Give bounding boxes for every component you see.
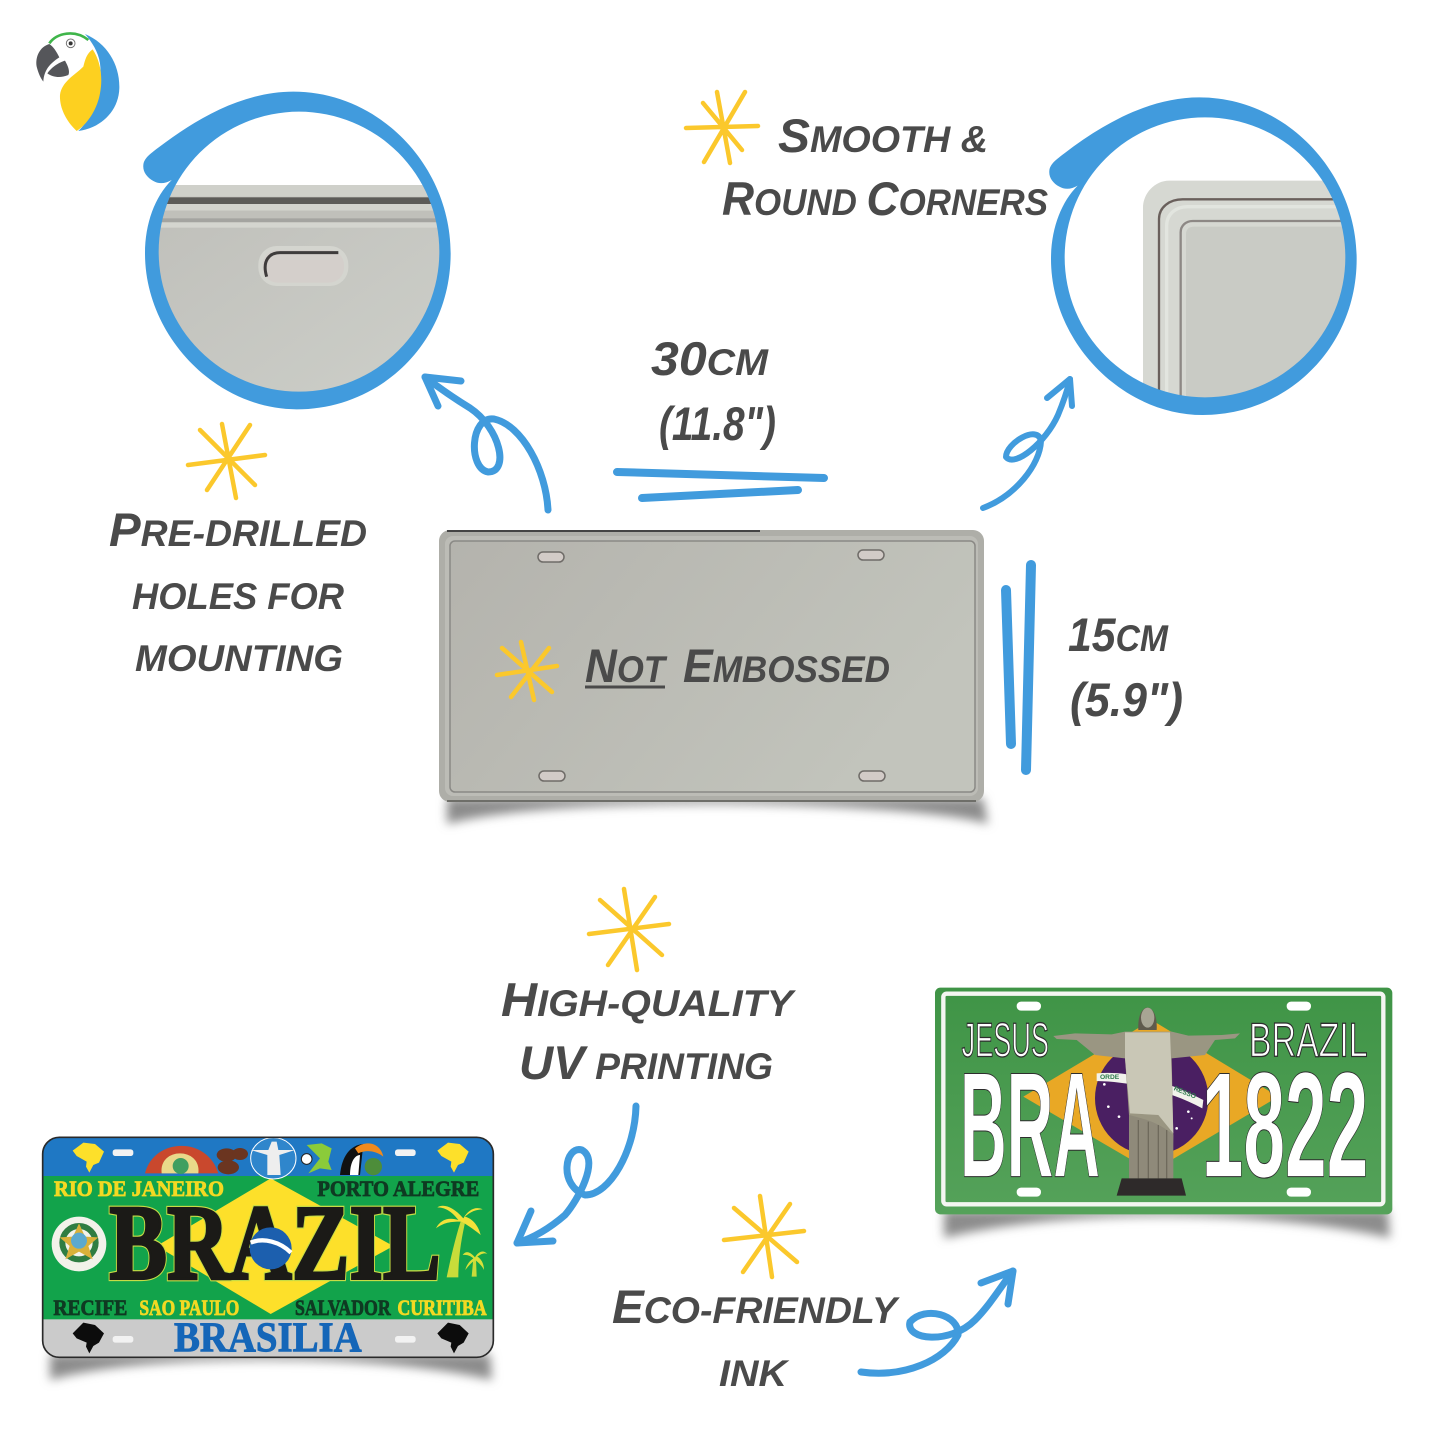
shadow: green plate [944, 1210, 1390, 1238]
shadow: center plate [447, 798, 988, 824]
jesus brazil words: JESUS [962, 1014, 1049, 1068]
plate holes [113, 1149, 416, 1343]
photo: mounting hole [158, 185, 440, 392]
label: smooth and round corners: ROUND CORNERS [722, 172, 1048, 225]
flag globe [250, 1227, 292, 1269]
label: pre-drilled holes [109, 503, 367, 679]
logo: parrot [36, 33, 119, 131]
flag globe: RESSO [1173, 1085, 1197, 1101]
icon: star uv [589, 889, 669, 970]
label: pre-drilled holes: MOUNTING [135, 638, 343, 679]
label: pre-drilled holes: HOLES FOR [132, 576, 344, 617]
width lines [617, 472, 824, 498]
label: eco-friendly ink: ECO-FRIENDLY [612, 1280, 900, 1333]
height lines [1006, 565, 1031, 770]
brasilia: BRASILIA [174, 1315, 362, 1362]
label: width 30cm [651, 332, 776, 450]
label: uv printing: UV PRINTING [519, 1036, 773, 1089]
label: eco-friendly ink: INK [719, 1353, 789, 1394]
label: not embossed: NOT [585, 639, 668, 692]
brazil maps [73, 1143, 469, 1173]
coat of arms [52, 1217, 106, 1271]
label: smooth and round corners: SMOOTH & [778, 109, 988, 162]
top decorations [145, 1138, 383, 1179]
label: pre-drilled holes: PRE-DRILLED [109, 503, 367, 556]
city names: CURITIBA [397, 1295, 487, 1320]
flag globe: ORDE [1100, 1074, 1120, 1081]
jesus brazil words: BRAZIL [1249, 1014, 1368, 1068]
shadow: brazil plate [50, 1354, 492, 1380]
ring [143, 92, 451, 409]
main word brazil: BRAZIL [109, 1185, 441, 1303]
icon: star not embossed [497, 642, 557, 700]
city names: PORTO ALEGRE [317, 1176, 479, 1201]
arrow: to hole close-up [425, 377, 548, 510]
icon: star pre-drilled [188, 424, 265, 498]
ring [1049, 97, 1357, 415]
main word brazil [108, 1205, 440, 1282]
icon: star smooth corners [686, 92, 758, 163]
plate number: BRA [960, 1041, 1100, 1209]
label: height 15cm: 15CM [1068, 608, 1169, 661]
panel: corner close-up [1049, 97, 1369, 419]
photo: rounded corner [1143, 180, 1346, 398]
label: width 30cm: (11.8") [659, 397, 776, 450]
label: width 30cm: 30CM [651, 332, 769, 385]
label: not embossed: EMBOSSED [683, 639, 890, 692]
holes [538, 550, 885, 781]
main word brazil: BRAZIL [109, 1185, 441, 1303]
flag diamond [1023, 1020, 1278, 1172]
panel: hole close-up [143, 92, 451, 409]
city names: RECIFE [53, 1295, 127, 1320]
jesus brazil words [962, 1014, 1368, 1068]
arrow: to green plate [861, 1271, 1013, 1373]
label: eco-friendly ink [612, 1280, 900, 1394]
icon: star eco [724, 1196, 804, 1277]
flag diamond [157, 1178, 393, 1314]
christ statue [1053, 1007, 1240, 1196]
panel: blank plate [439, 530, 984, 802]
city names: SAO PAULO [139, 1295, 239, 1320]
arrow: to corner close-up [983, 379, 1072, 508]
label: height 15cm [1068, 608, 1183, 726]
label: uv printing [501, 973, 797, 1089]
arrow: to brazil plate [517, 1106, 636, 1243]
plate: bra 1822 [935, 988, 1392, 1214]
city names: SALVADOR [295, 1295, 391, 1320]
flag globe [1095, 1042, 1208, 1155]
label: uv printing: HIGH-QUALITY [501, 973, 797, 1026]
label: not embossed [585, 639, 890, 692]
label: height 15cm: (5.9") [1070, 673, 1183, 726]
palm trees [436, 1206, 487, 1277]
label: smooth and round corners [722, 109, 1048, 225]
city names: RIO DE JANEIRO [54, 1176, 224, 1201]
city names [53, 1176, 487, 1320]
plate holes [1017, 1002, 1311, 1197]
plate: brazil cities [43, 1137, 493, 1362]
